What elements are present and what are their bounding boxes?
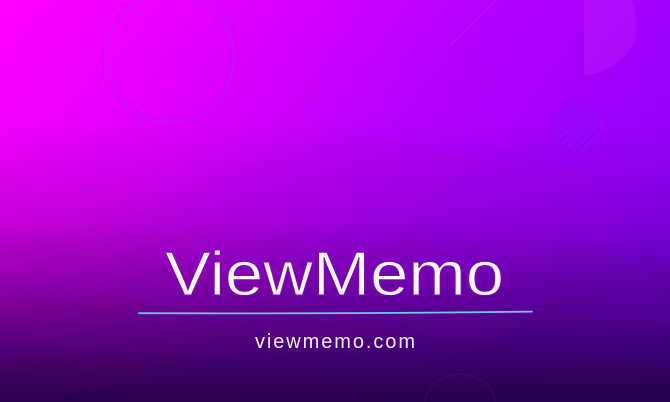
decorative circle outline — [106, 0, 234, 122]
underline — [139, 312, 532, 313]
decorative faint arc — [425, 374, 495, 402]
decorative hatched circle — [552, 99, 604, 151]
decorative half circle — [584, 0, 637, 76]
decorative diagonal line — [450, 0, 496, 45]
title: ViewMemo — [165, 240, 504, 309]
domain name: viewmemo.com — [255, 331, 415, 353]
